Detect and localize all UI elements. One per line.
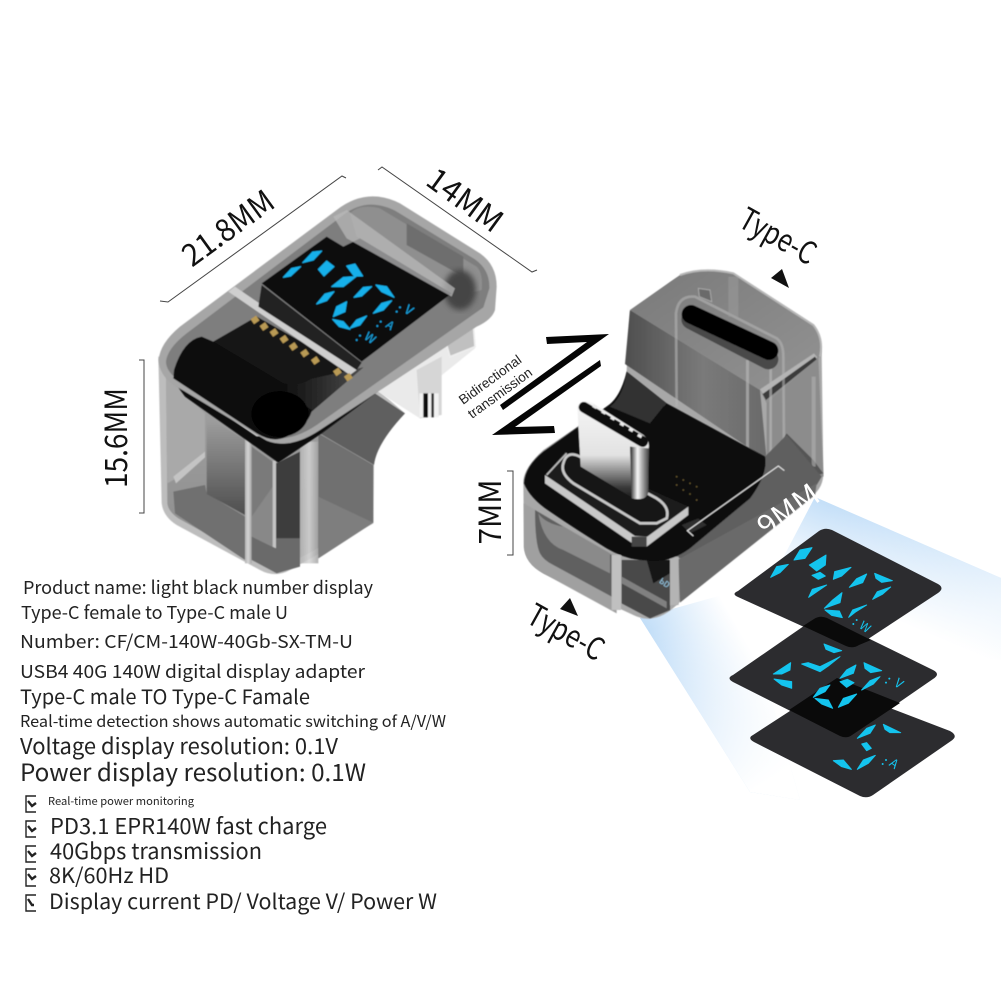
card: V reading: [730, 617, 937, 737]
dimension: 14MM: [378, 155, 537, 272]
base front right face: [678, 483, 817, 603]
black circuit board and connector: [173, 317, 363, 439]
display layer cards: [730, 529, 955, 797]
upper socket housing: [625, 270, 823, 487]
card digits: V: [891, 673, 908, 693]
card digits: [771, 548, 908, 773]
base left window: [524, 503, 617, 613]
light beam: [640, 497, 1001, 800]
gold contacts: [251, 315, 353, 382]
product description text: Product name: light black number display: [23, 574, 374, 600]
base top right surface: [663, 435, 822, 558]
label: upper Type-C with arrow: Type-C: [732, 194, 826, 273]
bidirectional transmission arrows: transmission: [465, 365, 535, 421]
card: W reading: [734, 529, 942, 647]
dimension: 14MM: 14MM: [419, 155, 514, 241]
underside dark edge: [172, 310, 477, 463]
upper translucent cavity: [350, 207, 482, 297]
product description text: Voltage display resolution: 0.1V: [20, 729, 338, 761]
card digits: A: [886, 753, 903, 773]
right adapter: connector view: [523, 270, 823, 619]
PCB dots: [676, 476, 697, 501]
feature checklist: Display current PD/ Voltage V/ Power W: [49, 886, 437, 916]
display unit labels: V: [401, 299, 418, 320]
translucent stripe: [228, 287, 357, 375]
product description text: [20, 574, 446, 788]
arrow label: Bidirectional: [456, 352, 524, 407]
9MM dimension bracket: [687, 466, 784, 536]
label: lower Type-C with arrow: Type-C: [520, 590, 614, 669]
side translucent plug tab: [370, 325, 475, 418]
checkbox icons: [26, 796, 36, 911]
left adapter: top view with display: [159, 196, 497, 463]
feature checklist: 40Gbps transmission: [50, 834, 262, 866]
dimension: 21.8MM: [160, 176, 346, 302]
left adapter: lower translucent body: [158, 357, 405, 574]
dimension: 15.6MM: 15.6MM: [91, 388, 136, 488]
display chip: [258, 285, 362, 370]
card overlaps: [803, 617, 871, 647]
bidirectional transmission arrows: [456, 334, 609, 435]
glass plug base: [545, 452, 688, 547]
product description text: USB4 40G 140W digital display adapter: [20, 658, 366, 684]
card: A reading: [750, 685, 955, 797]
product description text: Number: CF/CM-140W-40Gb-SX-TM-U: [20, 628, 353, 654]
display unit labels: [356, 299, 418, 348]
black floor: [524, 372, 766, 561]
display unit labels: W: [361, 328, 380, 348]
PD indicator: PD: [657, 575, 673, 590]
dimension: 21.8MM: 21.8MM: [171, 177, 282, 275]
top shell: [159, 196, 497, 444]
dimension: 15.6MM: [91, 360, 144, 513]
product description text: Type-C female to Type-C male U: [21, 599, 288, 625]
feature checklist: Real-time power monitoring: [48, 793, 195, 809]
display digits: [283, 251, 394, 329]
product description text: Type-C male TO Type-C Famale: [20, 681, 310, 710]
card digits: W: [856, 617, 875, 637]
feature checklist: [26, 793, 437, 916]
feature checklist: PD3.1 EPR140W fast charge: [50, 809, 327, 841]
product description text: Power display resolution: 0.1W: [20, 753, 366, 788]
feature checklist: 8K/60Hz HD: [49, 860, 169, 890]
Type-C plug: [577, 401, 649, 499]
dimension: 9MM: 9MM: [746, 471, 827, 546]
outer shell: [523, 272, 823, 619]
product description text: Real-time detection shows automatic switching of A/V/W: [20, 708, 446, 732]
display unit labels: A: [383, 317, 398, 334]
dimension: 7MM: 7MM: [465, 480, 510, 544]
